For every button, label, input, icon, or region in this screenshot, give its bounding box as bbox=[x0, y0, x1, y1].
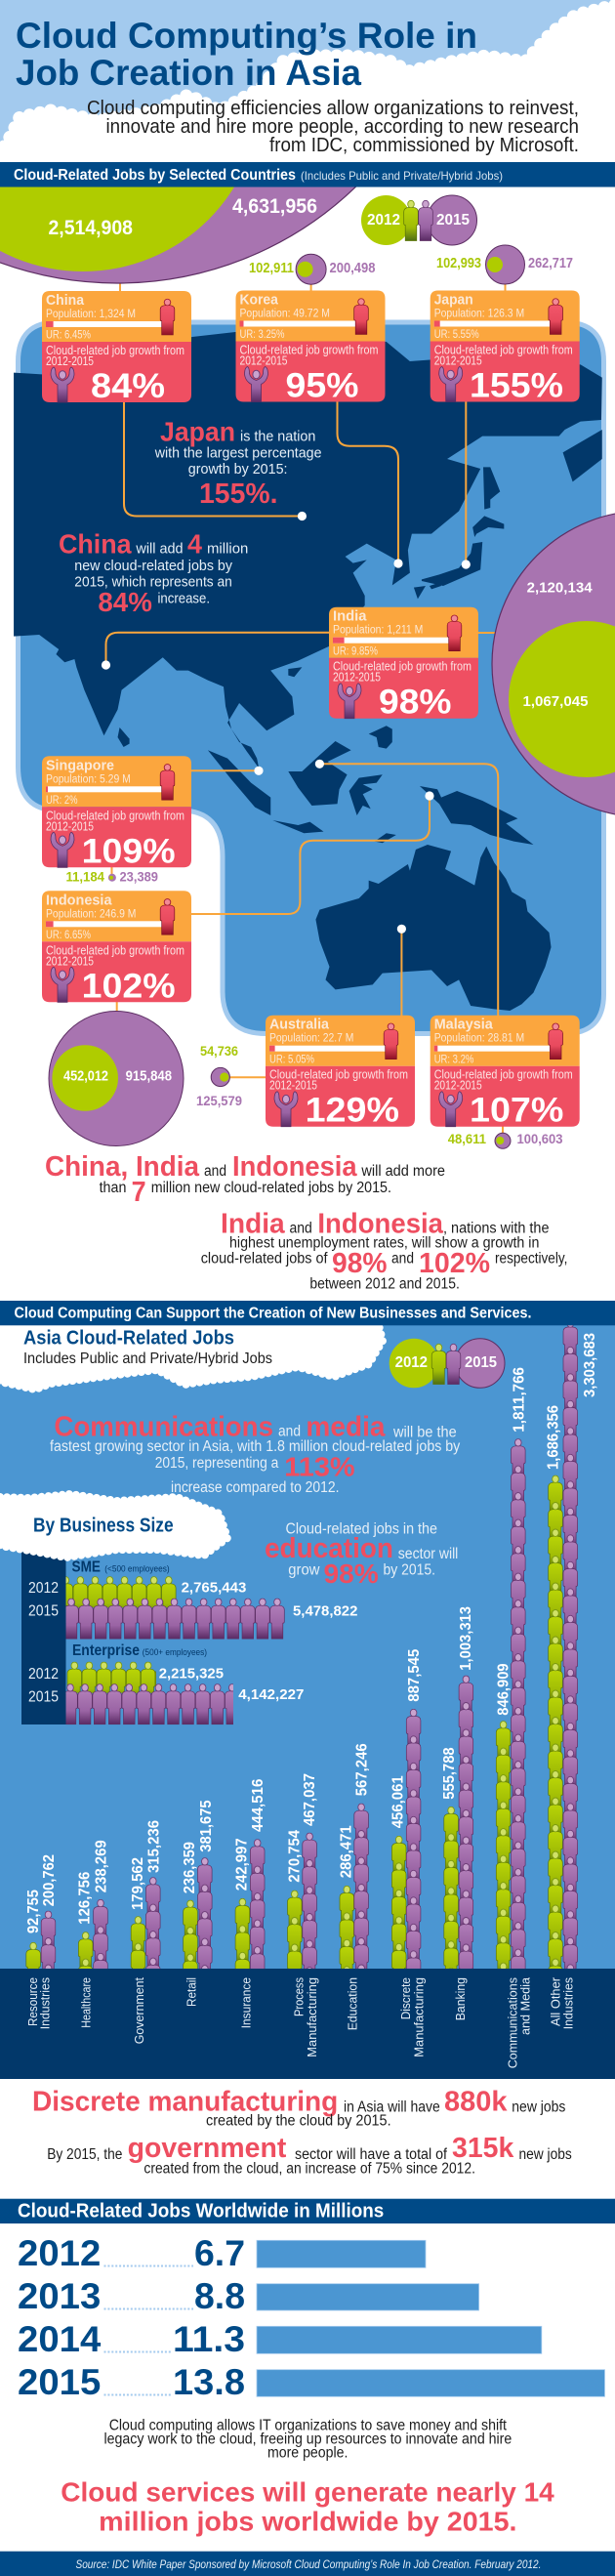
card: Korea: 95% bbox=[285, 367, 359, 404]
card: Singapore: Cloud-related job growth from bbox=[46, 809, 184, 822]
callout: India and Indonesia: respectively, bbox=[495, 1250, 567, 1267]
column chart: value labels: 1,686,356 bbox=[546, 1405, 562, 1470]
column chart: industry labels: Communications bbox=[506, 1977, 519, 2068]
callout: discrete manufacturing: Discrete manufacturing bbox=[32, 2087, 338, 2118]
bubble: China: 4,631,956 bbox=[232, 195, 317, 218]
callout: communications and media: increase compared to 2012. bbox=[171, 1479, 340, 1496]
card: Indonesia: Cloud-related job growth from bbox=[46, 943, 184, 957]
bubble: Indonesia bbox=[49, 1012, 184, 1146]
card: Australia: Cloud-related job growth from bbox=[269, 1068, 408, 1082]
heading: Asia cloud-related jobs: Includes Public and Private/Hybrid Jobs bbox=[23, 1350, 272, 1367]
card: China: Cloud-related job growth from bbox=[46, 344, 184, 357]
card: Malaysia: UR: 3.2% bbox=[434, 1054, 473, 1065]
business size labels: (500+ employees) bbox=[143, 1647, 207, 1658]
column chart: value labels: 92,755 bbox=[25, 1890, 42, 1933]
callout: discrete manufacturing: created by the cloud by 2015. bbox=[206, 2113, 391, 2130]
callout: India and Indonesia: highest unemployment rates, will show a growth in bbox=[229, 1234, 539, 1251]
card: Australia: 129% bbox=[306, 1092, 399, 1130]
card: Indonesia: Indonesia bbox=[46, 892, 112, 908]
card: Australia: 2012-2015 bbox=[269, 1079, 317, 1093]
callout: communications and media bbox=[50, 1412, 461, 1496]
callout: China, India and Indonesia: million new cloud-related jobs by 2015. bbox=[151, 1180, 391, 1196]
callout: China, India and Indonesia: and bbox=[204, 1163, 226, 1180]
column chart: value labels: 179,562 bbox=[130, 1857, 146, 1910]
callout: government bbox=[47, 2133, 572, 2177]
callout: China bbox=[59, 529, 248, 617]
column chart: industry labels: Banking bbox=[453, 1977, 468, 2020]
column chart: industry labels: Healthcare bbox=[78, 1977, 93, 2028]
closing paragraph: legacy work to the cloud, freeing up resources to innovate and hire bbox=[103, 2431, 512, 2447]
section heading: worldwide jobs bbox=[0, 2199, 615, 2223]
column chart: industry labels: Retail bbox=[184, 1977, 199, 2007]
business size labels: 2,215,325 bbox=[159, 1665, 224, 1682]
card: Japan bbox=[430, 291, 580, 404]
bar chart: worldwide jobs in millions: 13.8 bbox=[173, 2362, 245, 2402]
callout: communications and media: 2015, representing a bbox=[155, 1455, 279, 1472]
map land: Australia bbox=[315, 845, 552, 1011]
intro text: innovate and hire more people, according to new research bbox=[105, 116, 579, 138]
bar chart: worldwide jobs in millions: 2012 bbox=[18, 2233, 101, 2273]
closing paragraph bbox=[103, 2417, 512, 2462]
card: India: Population: 1,211 M bbox=[333, 625, 423, 637]
column chart: value labels: 444,516 bbox=[250, 1778, 266, 1832]
callout: government: created from the cloud, an increase of 75% since 2012. bbox=[144, 2160, 475, 2177]
card: Korea: Cloud-related job growth from bbox=[240, 344, 379, 357]
callout: Japan: is the nation bbox=[240, 429, 315, 445]
callout: India and Indonesia: and bbox=[391, 1250, 414, 1267]
cloud: business size heading bbox=[0, 1494, 227, 1558]
callout: Japan: 155%. bbox=[199, 478, 277, 510]
bubble: Australia: 54,736 bbox=[200, 1043, 238, 1059]
card: Japan: Population: 126.3 M bbox=[434, 309, 524, 320]
business size panel bbox=[21, 1549, 66, 1724]
legend: 2012 vs 2015 bbox=[361, 195, 476, 245]
column chart: value labels: 467,037 bbox=[302, 1773, 318, 1826]
card: Australia: Australia bbox=[269, 1017, 330, 1033]
column chart: value labels: 846,909 bbox=[495, 1663, 512, 1716]
legend: 2012 vs 2015: 2012 bbox=[367, 212, 400, 229]
card: India: 2012-2015 bbox=[333, 671, 381, 685]
card: Australia: UR: 5.05% bbox=[269, 1054, 314, 1065]
footer source bbox=[0, 2552, 615, 2576]
bubble: Indonesia: 452,012 bbox=[63, 1069, 108, 1085]
card: Singapore: UR: 2% bbox=[46, 795, 78, 807]
legend: 2012 vs 2015: 2015 bbox=[436, 212, 470, 229]
card: India: 98% bbox=[379, 684, 451, 722]
card: China bbox=[42, 291, 191, 405]
callout: education: sector will bbox=[398, 1546, 458, 1562]
card: Singapore: 109% bbox=[82, 832, 176, 870]
bar chart: worldwide jobs in millions: 6.7 bbox=[194, 2233, 245, 2273]
column chart: value labels: 3,303,683 bbox=[582, 1333, 598, 1397]
callout: China, India and Indonesia bbox=[45, 1151, 445, 1208]
callout: China, India and Indonesia: 7 bbox=[132, 1177, 146, 1208]
callout: China: million bbox=[207, 541, 248, 558]
callout: education: 98% bbox=[324, 1558, 379, 1589]
card: China: 84% bbox=[91, 367, 165, 405]
callout: communications and media: and bbox=[278, 1424, 301, 1440]
column chart: industry labels bbox=[0, 1969, 615, 2079]
bubble: Japan: 262,717 bbox=[528, 256, 573, 271]
bar chart: worldwide jobs in millions: 2014 bbox=[18, 2319, 102, 2359]
column chart: value labels: 200,762 bbox=[41, 1854, 58, 1906]
callout: government: government bbox=[128, 2133, 287, 2164]
callout: China: 84% bbox=[98, 587, 152, 617]
bubble: Malaysia: 100,603 bbox=[517, 1131, 563, 1146]
card: Malaysia: Malaysia bbox=[434, 1017, 493, 1033]
bubble: Indonesia: 915,848 bbox=[126, 1069, 172, 1085]
title: Job Creation in Asia bbox=[16, 53, 361, 93]
callout: India and Indonesia: Indonesia bbox=[317, 1208, 444, 1239]
map land: Asia bbox=[14, 332, 602, 845]
title: Cloud Computing’s Role in bbox=[16, 16, 477, 56]
bubble: China: 2,514,908 bbox=[49, 217, 133, 239]
callout: communications and media: Communications bbox=[54, 1412, 273, 1443]
callout: China: China bbox=[59, 529, 132, 560]
callout: India and Indonesia bbox=[201, 1208, 567, 1292]
card: Japan: Cloud-related job growth from bbox=[434, 344, 573, 357]
card: Indonesia: UR: 6.65% bbox=[46, 930, 91, 941]
closing headline bbox=[61, 2477, 554, 2537]
business size labels: 2,765,443 bbox=[182, 1580, 246, 1597]
map panel bbox=[18, 322, 603, 1033]
title bbox=[16, 16, 477, 93]
closing paragraph: Cloud computing allows IT organizations to save money and shift bbox=[109, 2417, 508, 2433]
card: Korea: UR: 3.25% bbox=[240, 329, 285, 341]
business size labels: 5,478,822 bbox=[293, 1602, 357, 1619]
card: Australia: Population: 22.7 M bbox=[269, 1033, 353, 1045]
heading: by business size: By Business Size bbox=[33, 1515, 174, 1536]
callout: India and Indonesia: cloud-related jobs of bbox=[201, 1250, 328, 1267]
card: Singapore: Singapore bbox=[46, 757, 114, 773]
column chart: value labels: 270,754 bbox=[287, 1830, 303, 1883]
callout: communications and media: media bbox=[306, 1412, 386, 1443]
column chart: value labels: 555,788 bbox=[441, 1747, 458, 1800]
bubble: India: 1,067,045 bbox=[523, 693, 588, 710]
card: Malaysia bbox=[430, 1016, 580, 1130]
card: Japan: Japan bbox=[434, 291, 473, 309]
bubble: Korea: 200,498 bbox=[330, 261, 375, 276]
bar chart: worldwide jobs in millions bbox=[18, 2233, 605, 2402]
business size labels: Enterprise bbox=[72, 1642, 140, 1659]
card: Singapore: Population: 5.29 M bbox=[46, 773, 131, 785]
bubble: Japan: 102,993 bbox=[436, 256, 481, 271]
callout: India and Indonesia: 98% bbox=[332, 1248, 388, 1279]
callout: Japan: growth by 2015: bbox=[188, 461, 287, 478]
card: India: India bbox=[333, 608, 367, 625]
card: Malaysia: 2012-2015 bbox=[434, 1079, 482, 1093]
card: Malaysia: Cloud-related job growth from bbox=[434, 1068, 573, 1082]
bubble: Australia bbox=[196, 1043, 242, 1108]
callout: Japan bbox=[154, 417, 322, 510]
card: China: Population: 1,324 M bbox=[46, 309, 136, 320]
card: Australia bbox=[266, 1016, 415, 1130]
callout: India and Indonesia: India bbox=[221, 1208, 286, 1239]
column chart: industry labels: Discrete bbox=[398, 1977, 413, 2019]
business size labels: 2015 bbox=[28, 1602, 59, 1619]
legend: 2012 vs 2015 (chart): 2015 bbox=[465, 1354, 497, 1371]
callout: government: By 2015, the bbox=[47, 2146, 122, 2163]
column chart: industry labels: and Media bbox=[517, 1976, 532, 2035]
column chart: industry labels: Process bbox=[292, 1977, 307, 2016]
section heading: worldwide jobs: Cloud-Related Jobs Worldwide in Millions bbox=[18, 2201, 384, 2223]
bar chart: worldwide jobs in millions: 11.3 bbox=[173, 2319, 245, 2359]
callout: communications and media: fastest growing sector in Asia, with 1.8 million cloud-related jobs by bbox=[50, 1438, 461, 1455]
closing paragraph: more people. bbox=[267, 2445, 348, 2462]
column chart: value labels: 456,061 bbox=[390, 1775, 407, 1828]
callout: India and Indonesia: between 2012 and 2015. bbox=[309, 1275, 460, 1292]
business size labels: (<500 employees) bbox=[104, 1563, 170, 1574]
card: Japan: 2012-2015 bbox=[434, 353, 482, 367]
callout: India and Indonesia: and bbox=[289, 1220, 312, 1236]
column chart: value labels: 315,236 bbox=[146, 1820, 163, 1873]
callout: education: Cloud-related jobs in the bbox=[285, 1521, 437, 1538]
card: Indonesia: 2012-2015 bbox=[46, 954, 94, 968]
heading: Asia cloud-related jobs bbox=[23, 1328, 272, 1367]
footer source: Source: IDC White Paper Sponsored by Microsoft Cloud Computing’s Role In Job Creation. February 2012. bbox=[76, 2559, 541, 2571]
callout: discrete manufacturing bbox=[32, 2087, 566, 2130]
cloud: Asia heading bbox=[0, 1325, 383, 1390]
column chart: value labels: 242,997 bbox=[233, 1838, 250, 1890]
business size labels: 2012 bbox=[28, 1580, 59, 1597]
card: India bbox=[329, 607, 478, 722]
intro text: from IDC, commissioned by Microsoft. bbox=[269, 135, 579, 156]
card: India: Cloud-related job growth from bbox=[333, 660, 472, 674]
card: China: 2012-2015 bbox=[46, 354, 94, 368]
bar chart: worldwide jobs in millions: 2013 bbox=[18, 2276, 101, 2316]
callout: government: 315k bbox=[452, 2133, 514, 2164]
business size labels: 4,142,227 bbox=[238, 1686, 304, 1703]
column chart: value labels: 1,003,313 bbox=[458, 1606, 474, 1671]
callout: India and Indonesia: 102% bbox=[419, 1248, 490, 1279]
callout: education: by 2015. bbox=[383, 1562, 435, 1579]
callout: Japan: Japan bbox=[160, 417, 235, 447]
intro text: Cloud computing efficiencies allow organizations to reinvest, bbox=[87, 98, 579, 119]
column chart: value labels: 381,675 bbox=[198, 1800, 215, 1852]
callout: government: sector will have a total of bbox=[295, 2146, 448, 2163]
column chart: person stacks by industry bbox=[26, 1320, 578, 2576]
callout: China: increase. bbox=[158, 590, 210, 606]
callout: Japan: with the largest percentage bbox=[154, 444, 322, 461]
column chart: value labels: 238,269 bbox=[94, 1840, 109, 1892]
column chart: value labels bbox=[25, 1333, 598, 1933]
callout: education: education bbox=[265, 1533, 393, 1564]
card: Singapore bbox=[42, 756, 191, 870]
card: Singapore: 2012-2015 bbox=[46, 819, 94, 833]
bubble: Japan bbox=[436, 245, 573, 284]
card: Malaysia: Population: 28.81 M bbox=[434, 1033, 524, 1045]
card: Japan: UR: 5.55% bbox=[434, 329, 479, 341]
callout: China, India and Indonesia: Indonesia bbox=[232, 1151, 357, 1183]
card: Korea: Population: 49.72 M bbox=[240, 309, 330, 320]
bubble: Singapore: 23,389 bbox=[119, 868, 158, 884]
callout: China: 2015, which represents an bbox=[74, 574, 232, 591]
card: Korea: 2012-2015 bbox=[240, 353, 288, 367]
business size labels: 2012 bbox=[28, 1666, 59, 1683]
closing headline: Cloud services will generate nearly 14 bbox=[61, 2477, 554, 2508]
column chart: industry labels: Manufacturing bbox=[412, 1977, 426, 2057]
callout: China: new cloud-related jobs by bbox=[74, 558, 232, 574]
callout: discrete manufacturing: in Asia will have bbox=[344, 2099, 440, 2116]
heading: Asia cloud-related jobs: Asia Cloud-Related Jobs bbox=[23, 1328, 234, 1350]
legend: 2012 vs 2015 (chart): 2012 bbox=[395, 1354, 428, 1371]
section heading: jobs by selected countries: (Includes Public and Private/Hybrid Jobs) bbox=[301, 169, 503, 183]
card: Malaysia: 107% bbox=[470, 1092, 563, 1130]
callout: communications and media: will be the bbox=[392, 1425, 457, 1441]
bubble: Singapore: 11,184 bbox=[66, 868, 104, 884]
card: China: UR: 6.45% bbox=[46, 330, 91, 342]
bubble: Singapore bbox=[66, 868, 158, 884]
callout: discrete manufacturing: 880k bbox=[444, 2087, 508, 2118]
column chart: industry labels: Manufacturing bbox=[305, 1977, 319, 2057]
bubble: Malaysia: 48,611 bbox=[448, 1131, 486, 1146]
chart panel background bbox=[0, 1325, 615, 1970]
section heading: jobs by selected countries: Cloud-Related Jobs by Selected Countries bbox=[14, 167, 296, 184]
callout: India and Indonesia: , nations with the bbox=[443, 1220, 549, 1236]
column chart: value labels: 236,359 bbox=[182, 1842, 198, 1893]
card: China: China bbox=[46, 292, 85, 309]
card: Japan: 155% bbox=[470, 367, 563, 404]
bubble: Korea bbox=[249, 254, 375, 284]
column chart: industry labels: Insurance bbox=[238, 1977, 253, 2028]
section heading: new businesses and services bbox=[0, 1301, 615, 1325]
card: India: UR: 9.85% bbox=[333, 645, 378, 657]
section heading: jobs by selected countries bbox=[0, 162, 615, 187]
bubble: China bbox=[0, 0, 461, 283]
callout: education: grow bbox=[288, 1562, 320, 1579]
business size people: SME bbox=[59, 1577, 284, 1639]
bubble: India: 2,120,134 bbox=[527, 580, 593, 597]
callout: China: 4 bbox=[187, 529, 202, 560]
column chart: value labels: 1,811,766 bbox=[511, 1367, 527, 1433]
closing headline: million jobs worldwide by 2015. bbox=[99, 2507, 516, 2537]
column chart: industry labels: All Other bbox=[548, 1976, 562, 2026]
bubble: Malaysia bbox=[448, 1131, 563, 1148]
callout: communications and media: 113% bbox=[284, 1452, 355, 1482]
bar chart: worldwide jobs in millions: 8.8 bbox=[194, 2276, 245, 2316]
business size labels: SME bbox=[72, 1558, 101, 1575]
column chart: industry labels: Resource bbox=[25, 1977, 40, 2026]
column chart: industry labels: Industries bbox=[561, 1977, 576, 2029]
callout: education bbox=[265, 1521, 458, 1589]
callout: China, India and Indonesia: than bbox=[100, 1180, 126, 1196]
column chart: value labels: 567,246 bbox=[354, 1743, 371, 1796]
card: Indonesia bbox=[42, 891, 191, 1005]
callout: government: new jobs bbox=[519, 2146, 572, 2163]
bubble: Australia: 125,579 bbox=[196, 1093, 242, 1108]
card: Korea: Korea bbox=[240, 291, 278, 309]
business size people: Enterprise bbox=[63, 1662, 283, 1724]
column chart: industry labels: Government bbox=[132, 1977, 146, 2044]
section heading: new businesses and services: Cloud Computing Can Support the Creation of New Businesses and Services. bbox=[14, 1305, 531, 1321]
column chart: value labels: 887,545 bbox=[406, 1648, 423, 1702]
bubble: Korea: 102,911 bbox=[249, 261, 294, 276]
card: Indonesia: 102% bbox=[82, 967, 176, 1005]
bar chart: worldwide jobs in millions: 2015 bbox=[18, 2362, 101, 2402]
connector lines and location dots bbox=[102, 279, 506, 1135]
column chart: industry labels: Industries bbox=[38, 1977, 53, 2029]
column chart: value labels: 126,756 bbox=[77, 1871, 94, 1925]
callout: China: will add bbox=[135, 541, 184, 558]
business size labels: 2015 bbox=[28, 1688, 59, 1705]
column chart: industry labels: Education bbox=[346, 1977, 360, 2030]
column chart: value labels: 286,471 bbox=[339, 1825, 355, 1878]
callout: discrete manufacturing: new jobs bbox=[512, 2099, 566, 2116]
header sky and clouds bbox=[0, 0, 615, 166]
card: Indonesia: Population: 246.9 M bbox=[46, 908, 136, 920]
intro text bbox=[87, 98, 579, 156]
business size labels bbox=[28, 1558, 357, 1705]
callout: China, India and Indonesia: will add more bbox=[360, 1163, 445, 1180]
legend: 2012 vs 2015 (chart) bbox=[390, 1339, 505, 1388]
bubble: India bbox=[492, 511, 615, 817]
callout: China, India and Indonesia: China, India bbox=[45, 1151, 200, 1183]
card: Korea bbox=[236, 291, 385, 404]
